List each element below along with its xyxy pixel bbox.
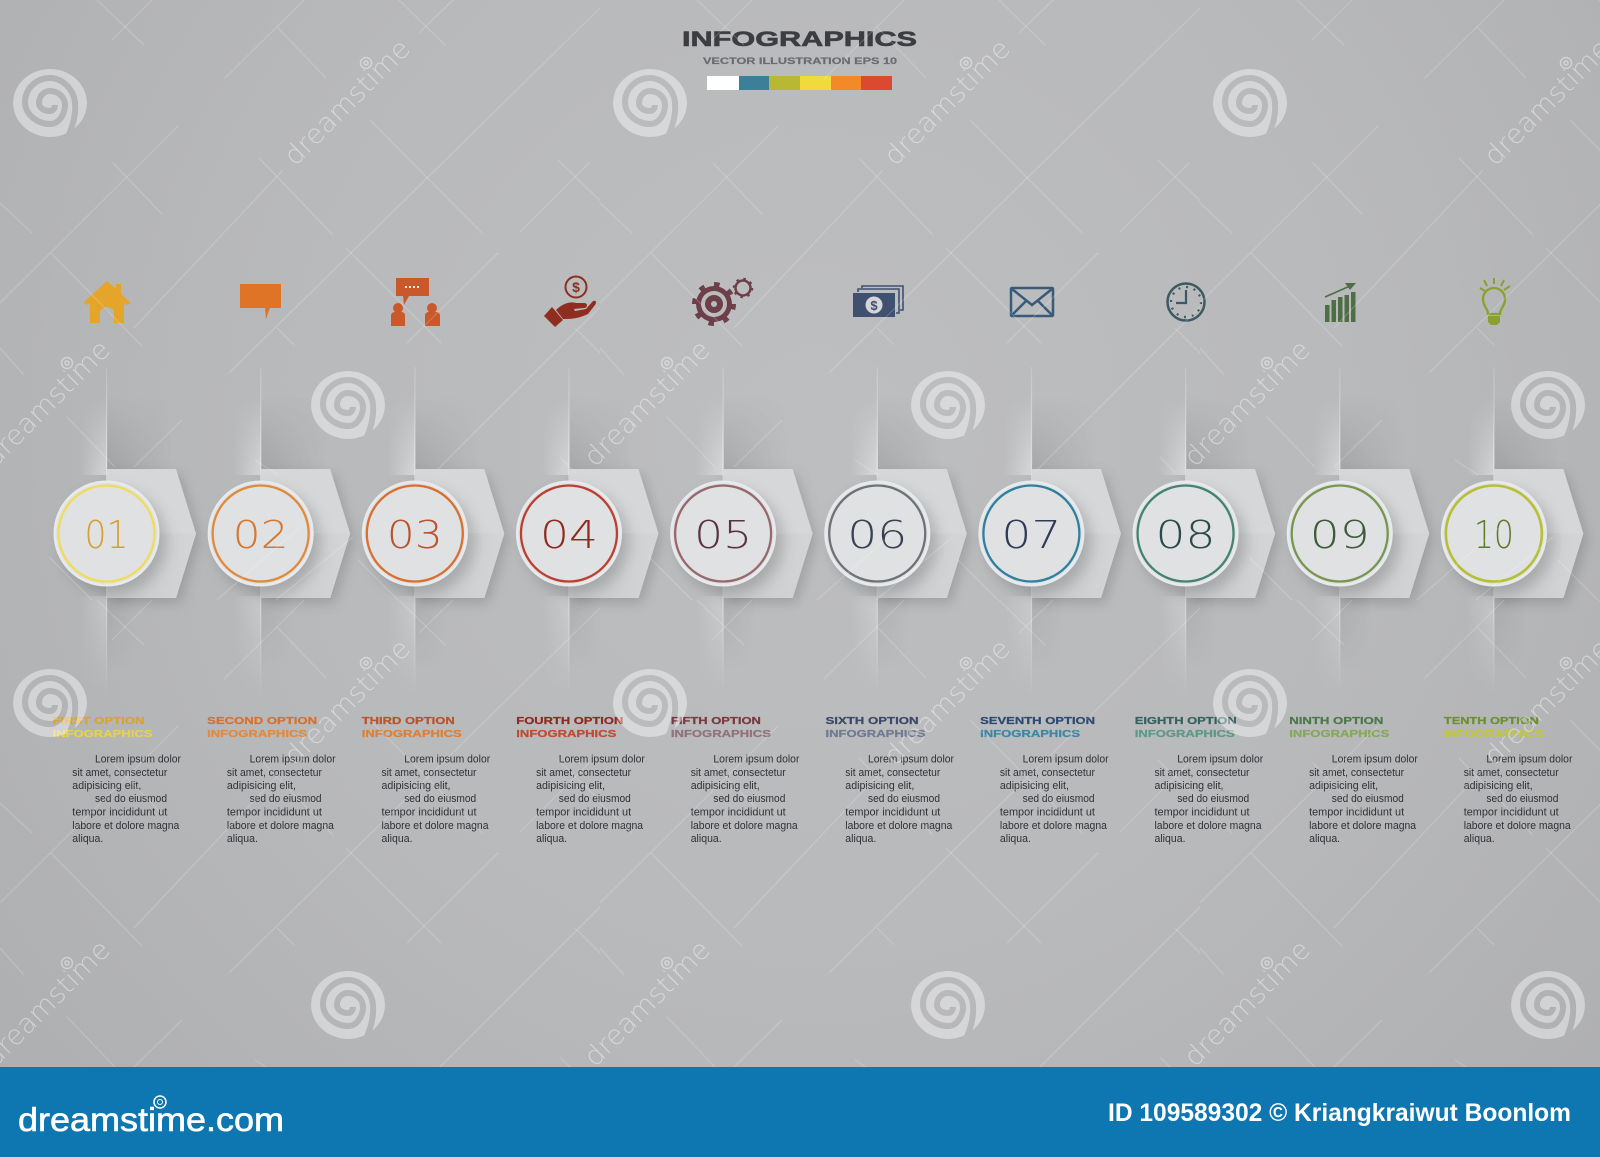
option 8 text: EIGHTH OPTION xyxy=(1135,716,1237,727)
step marker 08 xyxy=(1133,367,1275,697)
option 4 text: aliqua. xyxy=(536,833,567,845)
option 5 text: labore et dolore magna xyxy=(691,820,799,832)
footer credit: ID 109589302 © Kriangkraiwut Boonlom xyxy=(1108,1099,1571,1127)
option 9 text: adipisicing elit, xyxy=(1309,780,1378,792)
option 5 text: sit amet, consectetur xyxy=(691,767,786,779)
option 9 text: Lorem ipsum dolor xyxy=(1332,754,1418,766)
option 8 text: adipisicing elit, xyxy=(1154,780,1223,792)
step marker 04: 04 xyxy=(540,513,598,557)
footer logo: dreamstime.com xyxy=(18,1101,284,1138)
option 3 text: Lorem ipsum dolor xyxy=(404,754,491,766)
option 4 text: Lorem ipsum dolor xyxy=(559,754,645,766)
option 1 text: adipisicing elit, xyxy=(72,780,141,792)
step marker 10: 10 xyxy=(1474,513,1514,557)
option 1 text: INFOGRAPHICS xyxy=(52,729,153,740)
icon: rising bar chart xyxy=(1325,283,1356,322)
option 7 text: aliqua. xyxy=(1000,833,1031,845)
option 8 text: INFOGRAPHICS xyxy=(1135,729,1235,740)
option 6 text: sit amet, consectetur xyxy=(845,767,941,779)
option 7 text xyxy=(980,716,1109,845)
option 1 text: labore et dolore magna xyxy=(72,820,180,832)
option 5 text: sed do eiusmod xyxy=(713,793,785,805)
option 4 text: INFOGRAPHICS xyxy=(516,729,617,740)
step marker 07 xyxy=(978,367,1121,697)
option 10 text xyxy=(1444,716,1573,845)
option 9 text: labore et dolore magna xyxy=(1309,820,1417,832)
option 2 text: tempor incididunt ut xyxy=(227,806,322,818)
option 5 text xyxy=(671,716,800,845)
option 4 text: sit amet, consectetur xyxy=(536,767,631,779)
footer banner xyxy=(0,1067,1600,1157)
option 1 text: FIRST OPTION xyxy=(52,716,144,727)
option 1 text: tempor incididunt ut xyxy=(72,806,167,818)
option 7 text: adipisicing elit, xyxy=(1000,780,1069,792)
step marker 05: 05 xyxy=(694,513,752,557)
option 7 text: sit amet, consectetur xyxy=(1000,767,1095,779)
option 9 text: NINTH OPTION xyxy=(1289,716,1383,727)
option 3 text: sed do eiusmod xyxy=(404,793,476,805)
option 2 text: adipisicing elit, xyxy=(227,780,296,792)
option 1 text: Lorem ipsum dolor xyxy=(95,754,181,766)
option 10 text: labore et dolore magna xyxy=(1464,820,1572,832)
colour swatch bar xyxy=(707,76,892,90)
option 4 text: sed do eiusmod xyxy=(559,793,631,805)
option 6 text: tempor incididunt ut xyxy=(845,806,940,818)
option 8 text: labore et dolore magna xyxy=(1154,820,1262,832)
option 10 text: aliqua. xyxy=(1464,833,1495,845)
option 5 text: FIFTH OPTION xyxy=(671,716,761,727)
option 2 text: Lorem ipsum dolor xyxy=(250,754,336,766)
step marker 03: 03 xyxy=(387,513,443,557)
icon: envelope xyxy=(1011,288,1053,316)
option 5 text: adipisicing elit, xyxy=(691,780,760,792)
step marker 01: 01 xyxy=(84,513,128,557)
option 4 text: FOURTH OPTION xyxy=(516,716,623,727)
option 2 text: SECOND OPTION xyxy=(207,716,317,727)
icon: house xyxy=(83,281,131,323)
option 10 text: sed do eiusmod xyxy=(1486,793,1558,805)
option 3 text: INFOGRAPHICS xyxy=(362,729,462,740)
option 3 text: sit amet, consectetur xyxy=(382,767,477,779)
step marker 02: 02 xyxy=(233,513,289,557)
option 9 text xyxy=(1289,716,1418,845)
option 10 text: Lorem ipsum dolor xyxy=(1486,754,1573,766)
option 10 text: TENTH OPTION xyxy=(1444,716,1539,727)
option 5 text: INFOGRAPHICS xyxy=(671,729,771,740)
icon: speech bubble xyxy=(240,284,281,319)
option 4 text: labore et dolore magna xyxy=(536,820,644,832)
icon: hand holding coin xyxy=(544,276,596,327)
step marker 02 xyxy=(208,367,350,697)
icon: banknotes: $ xyxy=(870,298,878,313)
option 3 text: tempor incididunt ut xyxy=(382,806,477,818)
icon: clock xyxy=(1168,284,1204,320)
step marker 03 xyxy=(362,367,504,697)
option 10 text: adipisicing elit, xyxy=(1464,780,1533,792)
option 3 text: aliqua. xyxy=(382,833,413,845)
option 2 text: labore et dolore magna xyxy=(227,820,335,832)
option 2 text: aliqua. xyxy=(227,833,258,845)
option 1 text: sed do eiusmod xyxy=(95,793,167,805)
icon: gears xyxy=(694,279,752,324)
option 10 text: INFOGRAPHICS xyxy=(1444,729,1544,740)
title: INFOGRAPHICS xyxy=(682,28,917,51)
step marker 09: 09 xyxy=(1310,513,1370,557)
option 6 text: SIXTH OPTION xyxy=(826,716,918,727)
step marker 09 xyxy=(1287,367,1429,697)
option 3 text: adipisicing elit, xyxy=(382,780,451,792)
option 8 text: sit amet, consectetur xyxy=(1154,767,1250,779)
option 6 text: adipisicing elit, xyxy=(845,780,914,792)
option 9 text: aliqua. xyxy=(1309,833,1340,845)
option 6 text xyxy=(826,716,954,845)
option 8 text: aliqua. xyxy=(1154,833,1185,845)
option 1 text: sit amet, consectetur xyxy=(72,767,168,779)
option 6 text: labore et dolore magna xyxy=(845,820,953,832)
option 8 text: sed do eiusmod xyxy=(1177,793,1249,805)
option 6 text: INFOGRAPHICS xyxy=(826,729,926,740)
option 3 text: THIRD OPTION xyxy=(362,716,455,727)
title block xyxy=(682,28,917,90)
icon: hand holding coin: $ xyxy=(572,279,580,295)
option 1 text xyxy=(52,716,181,845)
option 6 text: sed do eiusmod xyxy=(868,793,940,805)
option 9 text: sed do eiusmod xyxy=(1332,793,1404,805)
option 7 text: tempor incididunt ut xyxy=(1000,806,1095,818)
step marker 07: 07 xyxy=(1001,513,1061,557)
option 2 text xyxy=(207,716,336,845)
option 5 text: tempor incididunt ut xyxy=(691,806,786,818)
option 5 text: Lorem ipsum dolor xyxy=(713,754,800,766)
option 4 text: tempor incididunt ut xyxy=(536,806,631,818)
option 8 text: tempor incididunt ut xyxy=(1154,806,1249,818)
step marker 04 xyxy=(516,367,658,697)
option 2 text: sit amet, consectetur xyxy=(227,767,322,779)
option 10 text: sit amet, consectetur xyxy=(1464,767,1559,779)
icon: banknotes xyxy=(853,286,903,317)
option 4 text: adipisicing elit, xyxy=(536,780,605,792)
option 9 text: tempor incididunt ut xyxy=(1309,806,1404,818)
option 2 text: INFOGRAPHICS xyxy=(207,729,308,740)
option 10 text: tempor incididunt ut xyxy=(1464,806,1559,818)
step marker 06 xyxy=(824,367,967,697)
option 8 text: Lorem ipsum dolor xyxy=(1177,754,1264,766)
option 7 text: INFOGRAPHICS xyxy=(980,729,1081,740)
option 7 text: SEVENTH OPTION xyxy=(980,716,1095,727)
option 7 text: sed do eiusmod xyxy=(1023,793,1095,805)
option 2 text: sed do eiusmod xyxy=(250,793,322,805)
option 7 text: Lorem ipsum dolor xyxy=(1023,754,1109,766)
step marker 08: 08 xyxy=(1156,513,1216,557)
icon: two people talking xyxy=(391,278,440,326)
option 8 text xyxy=(1135,716,1264,845)
option 9 text: sit amet, consectetur xyxy=(1309,767,1404,779)
option 7 text: labore et dolore magna xyxy=(1000,820,1108,832)
option 3 text xyxy=(362,716,491,845)
option 6 text: aliqua. xyxy=(845,833,876,845)
icon: light bulb xyxy=(1480,278,1510,325)
option 6 text: Lorem ipsum dolor xyxy=(868,754,954,766)
step marker 06: 06 xyxy=(847,513,907,557)
option 3 text: labore et dolore magna xyxy=(382,820,489,832)
option 9 text: INFOGRAPHICS xyxy=(1289,729,1390,740)
option 5 text: aliqua. xyxy=(691,833,722,845)
step marker 05 xyxy=(670,367,813,697)
step marker 10 xyxy=(1441,367,1583,697)
subtitle: VECTOR ILLUSTRATION EPS 10 xyxy=(703,56,897,66)
option 1 text: aliqua. xyxy=(72,833,103,845)
option 4 text xyxy=(516,716,645,845)
step marker 01 xyxy=(54,367,196,697)
